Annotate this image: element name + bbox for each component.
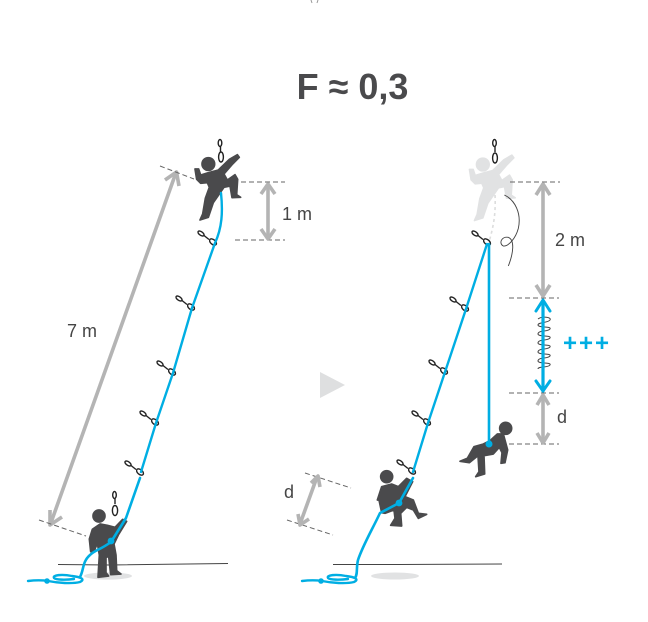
label: 7 m: 7 m bbox=[67, 321, 97, 341]
rope tie-in points bbox=[44, 538, 114, 584]
label: d left: d bbox=[284, 482, 294, 502]
arrow: d on belayer side bbox=[298, 476, 320, 525]
ghost rope dotted bbox=[489, 195, 495, 242]
ground line bbox=[58, 564, 228, 565]
ground line bbox=[333, 563, 502, 566]
label: +++: +++ bbox=[563, 330, 609, 357]
arrow: 2 m fall height bbox=[536, 184, 550, 296]
arrow: d on climber side bbox=[537, 395, 549, 443]
arrow: 7 m rope length bbox=[50, 172, 179, 525]
label: 1 m: 1 m bbox=[282, 204, 312, 224]
icon: play arrow between states bbox=[320, 372, 345, 398]
arrow: rope stretch bbox=[536, 300, 550, 391]
shadow under belayer bbox=[84, 572, 132, 580]
quickdraws on the wall bbox=[396, 230, 492, 475]
shadow on ground bbox=[371, 572, 419, 580]
fall trajectory curve with loop bbox=[501, 195, 519, 266]
belayer silhouette bbox=[89, 510, 127, 577]
quickdraws on the wall bbox=[124, 230, 218, 476]
climber silhouette bbox=[195, 155, 241, 220]
label: d: d bbox=[557, 407, 567, 427]
icon: top anchor quickdraw bbox=[493, 140, 497, 163]
ghost climber before fall bbox=[469, 155, 515, 220]
coil spring for rope stretch bbox=[538, 317, 550, 369]
label: 2 m: 2 m bbox=[555, 230, 585, 250]
falling climber hanging on the rope bbox=[460, 422, 512, 477]
belayer lifted off the ground bbox=[377, 471, 427, 526]
title: F ≈ 0,3 bbox=[297, 66, 408, 107]
rope tie-in points bbox=[318, 440, 492, 584]
arrow: 1 m above the last quickdraw bbox=[261, 184, 275, 239]
cropped marks at top edge bbox=[311, 0, 318, 3]
blue rope bbox=[302, 244, 489, 583]
icon: belayer anchor quickdraw bbox=[112, 492, 118, 516]
dashed measure lines bbox=[39, 166, 285, 536]
panel: normal climb before the fall bbox=[28, 140, 312, 584]
blue rope bbox=[28, 193, 222, 583]
panel: after the fall bbox=[284, 140, 609, 584]
icon: top anchor quickdraw bbox=[218, 140, 223, 162]
dashed measure lines bbox=[287, 182, 560, 535]
